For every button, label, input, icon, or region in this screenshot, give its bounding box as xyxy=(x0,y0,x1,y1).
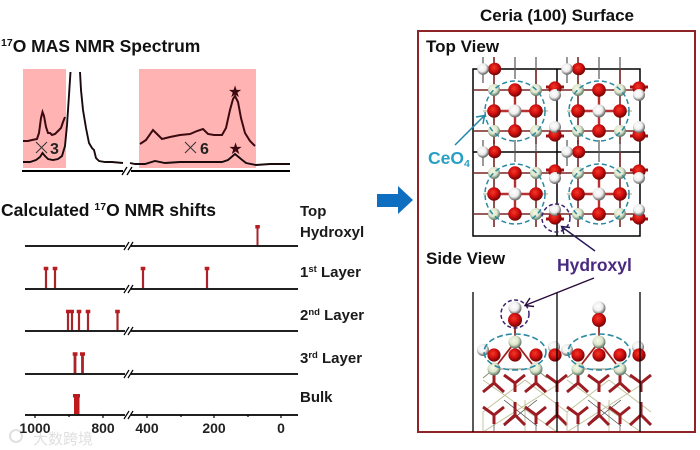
CeO4 dashed circles xyxy=(485,81,629,224)
label: CeO4: 4 xyxy=(464,158,470,170)
heading: Side View: Side View xyxy=(426,249,506,268)
layer labels: st xyxy=(308,264,318,275)
layer labels: rd xyxy=(308,350,318,361)
layer labels: Layer xyxy=(320,307,364,324)
heading: 17O MAS NMR Spectrum: 17 xyxy=(1,37,13,49)
spectrum upper trace left xyxy=(23,112,65,141)
title: Ceria (100) Surface: Ceria (100) Surface xyxy=(480,6,634,25)
spectrum lower trace with main peak xyxy=(23,72,290,165)
layer labels: 2 xyxy=(300,307,308,324)
heading: Calculated 17O NMR shifts: O NMR shifts xyxy=(106,200,216,220)
spectrum axis with break xyxy=(22,170,290,172)
hydroxyl dashed circle top view xyxy=(542,204,570,232)
row: 1st layer xyxy=(25,268,298,293)
panel: ceria surface xyxy=(418,31,695,432)
layer labels: Layer xyxy=(318,350,362,367)
star marker lower: ★ xyxy=(228,139,243,158)
calculated shifts chart xyxy=(25,225,298,419)
heading: Top View: Top View xyxy=(426,37,500,56)
layer labels: Hydroxyl xyxy=(300,224,364,241)
axis tick labels xyxy=(19,420,285,436)
layer labels: Top xyxy=(300,203,326,220)
arrow: hydroxyl pointer to top view xyxy=(562,226,595,251)
spectrum chart xyxy=(22,69,290,175)
layer labels: nd xyxy=(308,307,320,318)
multiplier label x3: 3 xyxy=(50,141,59,158)
spectrum upper trace right xyxy=(140,96,255,146)
multiplier label x6 xyxy=(185,141,209,158)
heading: Calculated 17O NMR shifts: Calculated xyxy=(1,200,90,220)
arrow: CeO4 pointer xyxy=(455,116,484,145)
row: top hydroxyl xyxy=(25,225,298,250)
row: 2nd layer xyxy=(25,311,298,335)
heading: Calculated 17O NMR shifts: 17 xyxy=(94,201,106,213)
layer labels: Bulk xyxy=(300,389,333,406)
multiplier label x6: 6 xyxy=(200,141,209,158)
axis tick labels: 400 xyxy=(135,420,159,436)
axis tick labels: 800 xyxy=(91,420,115,436)
axis tick labels: 0 xyxy=(277,420,285,436)
arrow: blue right arrow xyxy=(377,186,413,214)
label: Hydroxyl: Hydroxyl xyxy=(557,255,632,275)
multiplier label x3 xyxy=(36,141,59,158)
side view lattice xyxy=(473,292,651,432)
axis break mark xyxy=(122,167,132,175)
layer labels: 3 xyxy=(300,350,308,367)
row: 3rd layer xyxy=(25,353,298,378)
layer labels: 1 xyxy=(300,264,308,281)
highlighted band: right xyxy=(139,69,256,168)
label: CeO4: CeO xyxy=(428,148,464,168)
watermark xyxy=(10,430,93,448)
arrow: hydroxyl pointer to side view xyxy=(525,278,594,306)
star marker upper: ★ xyxy=(228,82,242,101)
CeO4 dashed ellipses side view xyxy=(484,334,630,370)
layer labels: Layer xyxy=(317,264,361,281)
layer labels xyxy=(300,203,364,406)
axis tick labels: 1000 xyxy=(19,420,51,436)
top view lattice xyxy=(473,57,648,236)
highlighted band: left xyxy=(23,69,66,168)
axis tick labels: 200 xyxy=(202,420,226,436)
heading: 17O MAS NMR Spectrum: O MAS NMR Spectrum xyxy=(13,36,200,56)
hydroxyl dashed circle side view xyxy=(501,300,529,328)
row: bulk with numeric axis xyxy=(25,394,298,419)
watermark: 大数跨境 xyxy=(33,430,93,448)
